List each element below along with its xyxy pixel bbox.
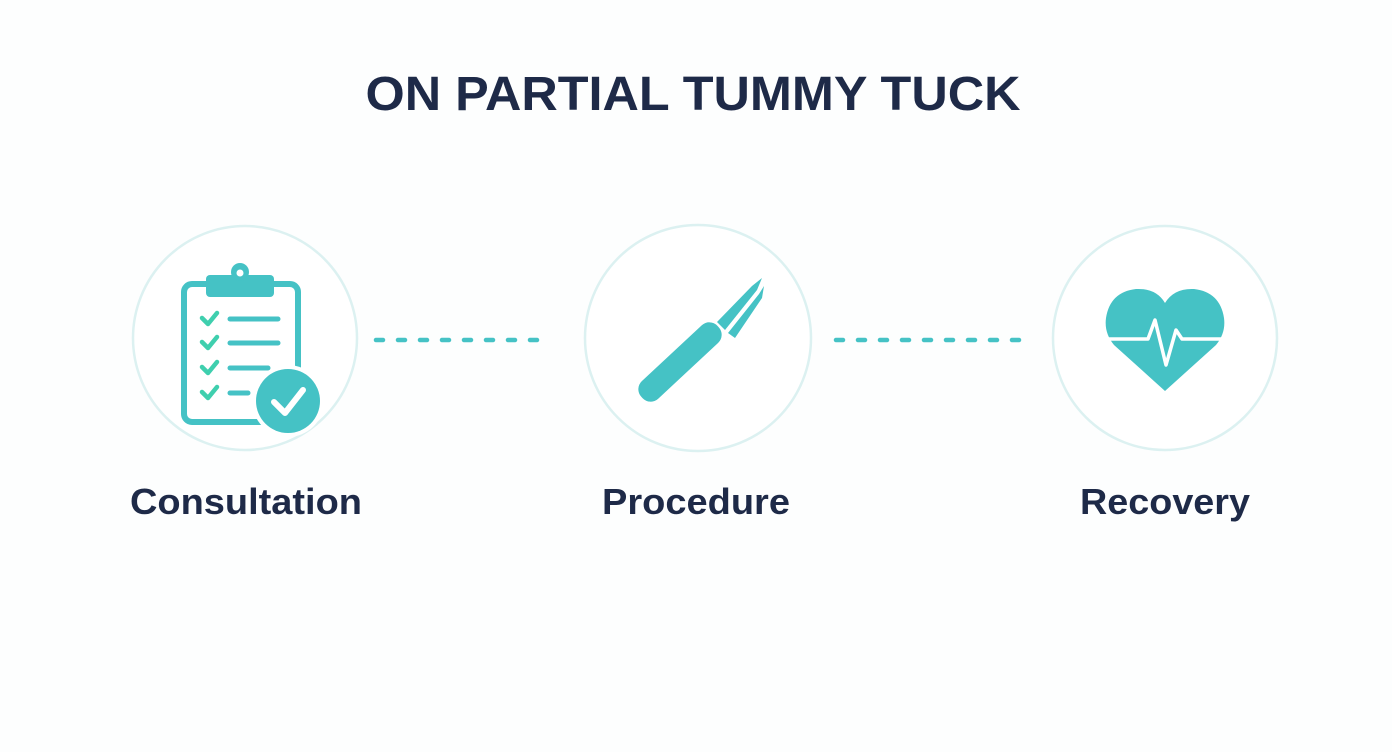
icon: scalpel [634, 278, 764, 406]
step: procedure [585, 225, 811, 522]
connector: dotted line 2 [836, 338, 1022, 342]
icon: clipboard [184, 263, 324, 437]
step: consultation [130, 226, 362, 522]
label: consultation: Consultation [130, 481, 362, 522]
circle: consultation [133, 226, 357, 450]
circle: recovery [1053, 226, 1277, 450]
icon: heart with pulse [1106, 289, 1224, 391]
connector: dotted line 1 [376, 338, 550, 342]
step: recovery [1053, 226, 1277, 522]
label: recovery: Recovery [1080, 481, 1250, 522]
circle: procedure [585, 225, 811, 451]
title: ON PARTIAL TUMMY TUCK [366, 68, 1021, 121]
icon: check badge [252, 365, 324, 437]
label: procedure: Procedure [602, 481, 790, 522]
